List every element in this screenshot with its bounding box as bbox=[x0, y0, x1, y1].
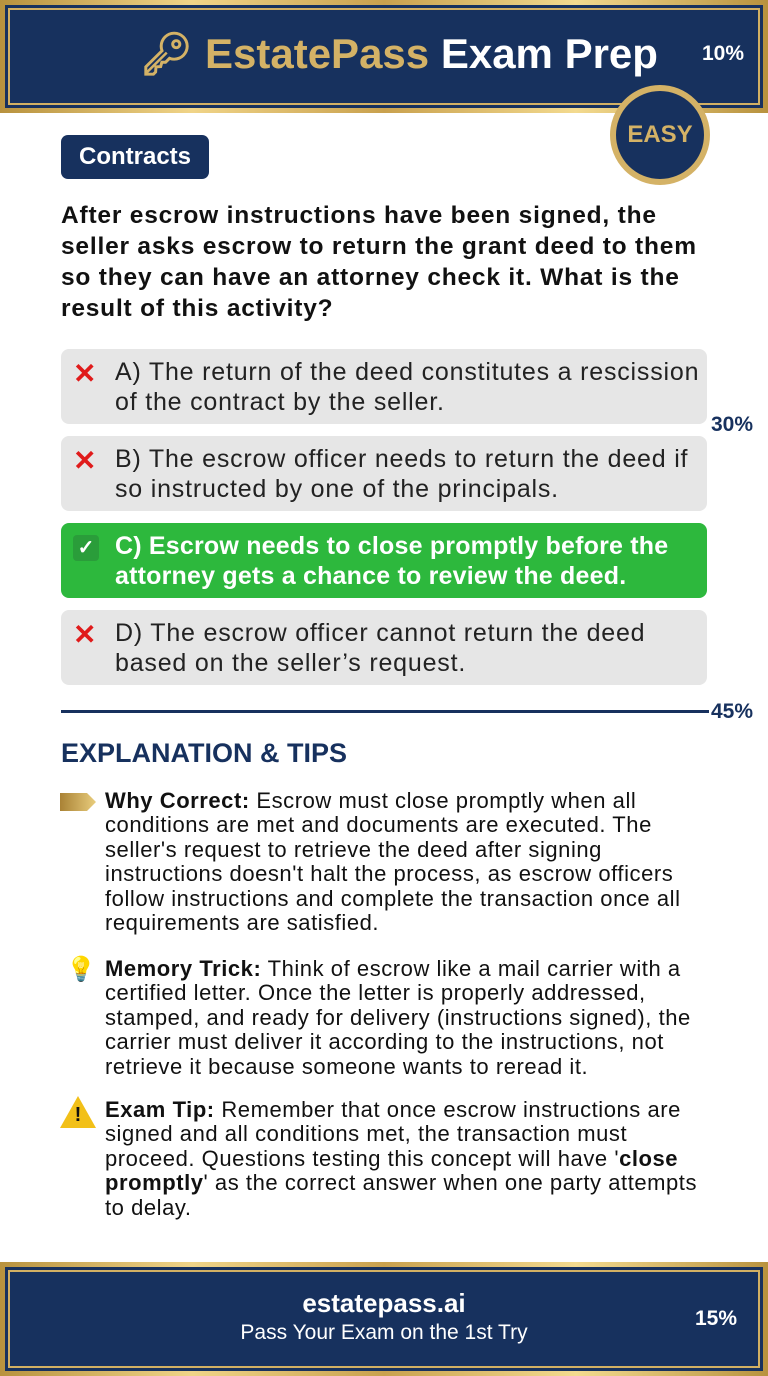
question: result of this activity? bbox=[61, 295, 333, 322]
option B bbox=[61, 436, 707, 511]
option C correct: attorney gets a chance to review the deed. bbox=[115, 562, 626, 590]
option C correct: C) Escrow needs to close promptly before the bbox=[115, 532, 668, 560]
why correct: follow instructions and complete the transaction once all bbox=[105, 886, 681, 911]
exam tip: to delay. bbox=[105, 1195, 191, 1220]
exam tip: promptly' as the correct answer when one party attempts bbox=[105, 1170, 697, 1195]
why correct: Why Correct: Escrow must close promptly when all bbox=[105, 788, 636, 813]
exam tip bbox=[105, 1097, 697, 1220]
explanation heading: EXPLANATION & TIPS bbox=[61, 738, 347, 768]
why correct: seller's request to retrieve the deed after signing bbox=[105, 837, 602, 862]
footer banner bbox=[0, 1262, 768, 1376]
why correct: requirements are satisfied. bbox=[105, 910, 379, 935]
footer text bbox=[240, 1288, 528, 1344]
memory trick: stamped, and ready for delivery (instructions signed), the bbox=[105, 1005, 691, 1030]
why correct: conditions are met and documents are executed. The bbox=[105, 812, 652, 837]
question: After escrow instructions have been signed, the bbox=[61, 202, 657, 229]
icon: warning bbox=[60, 1096, 96, 1128]
exam tip: signed and all conditions met, the transaction must bbox=[105, 1121, 627, 1146]
option B: ✕ bbox=[73, 445, 96, 476]
option D: D) The escrow officer cannot return the deed bbox=[115, 619, 645, 647]
percent 10: 10% bbox=[702, 42, 744, 65]
percent 30: 30% bbox=[711, 413, 753, 436]
easy badge bbox=[610, 85, 710, 185]
footer text: estatepass.ai bbox=[302, 1288, 466, 1318]
option A bbox=[61, 349, 707, 424]
exam tip: Exam Tip: Remember that once escrow instructions are bbox=[105, 1097, 681, 1122]
option D bbox=[61, 610, 707, 685]
question: so they can have an attorney check it. What is the bbox=[61, 264, 680, 291]
footer text: Pass Your Exam on the 1st Try bbox=[240, 1321, 528, 1344]
easy badge: EASY bbox=[627, 121, 693, 148]
option A: A) The return of the deed constitutes a rescission bbox=[115, 358, 699, 386]
title: 🔑︎ EstatePass Exam Prep bbox=[140, 30, 658, 77]
percent 45: 45% bbox=[711, 700, 753, 723]
category tag: Contracts bbox=[79, 143, 191, 170]
option B: B) The escrow officer needs to return the deed if bbox=[115, 445, 688, 473]
option A: ✕ bbox=[73, 358, 96, 389]
option D: based on the seller’s request. bbox=[115, 649, 466, 677]
icon: gold tag bbox=[60, 793, 96, 811]
category tag bbox=[61, 135, 209, 179]
percent 15: 15% bbox=[695, 1307, 737, 1330]
memory trick: certified letter. Once the letter is properly addressed, bbox=[105, 980, 646, 1005]
divider bbox=[61, 710, 709, 713]
exam tip: proceed. Questions testing this concept will have 'close bbox=[105, 1146, 678, 1171]
memory trick: retrieve it because someone wants to reread it. bbox=[105, 1054, 588, 1079]
header banner bbox=[0, 0, 768, 113]
question bbox=[61, 202, 697, 322]
option A: of the contract by the seller. bbox=[115, 388, 445, 416]
option B: so instructed by one of the principals. bbox=[115, 475, 559, 503]
why correct bbox=[105, 788, 681, 935]
option C correct: ✓ bbox=[78, 537, 94, 559]
option D: ✕ bbox=[73, 619, 96, 650]
why correct: instructions doesn't halt the process, as escrow officers bbox=[105, 861, 673, 886]
icon: light bulb: 💡 bbox=[66, 956, 96, 983]
memory trick: carrier must deliver it according to the instructions, not bbox=[105, 1029, 664, 1054]
option C correct bbox=[61, 523, 707, 598]
memory trick bbox=[105, 956, 691, 1079]
memory trick: Memory Trick: Think of escrow like a mail carrier with a bbox=[105, 956, 681, 981]
icon: warning: ! bbox=[75, 1104, 81, 1126]
question: seller asks escrow to return the grant deed to them bbox=[61, 233, 697, 260]
